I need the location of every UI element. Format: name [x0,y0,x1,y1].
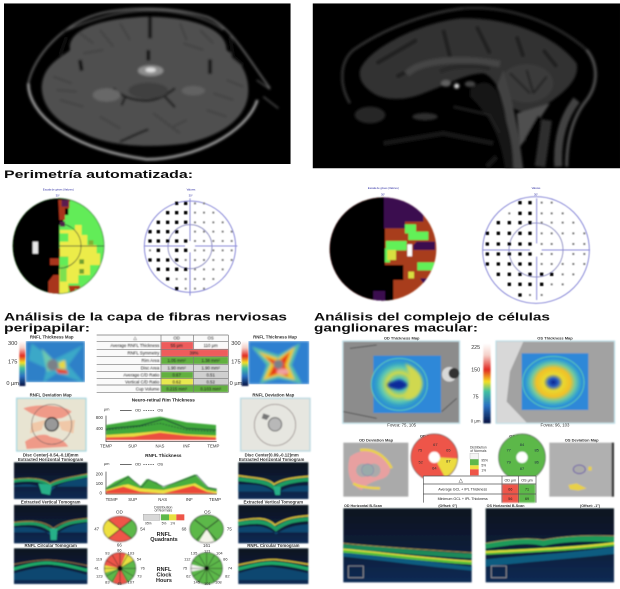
chart: neuro-retinal rim thickness: µm [104,406,110,411]
RNFL data table: RNFL Symmetry [128,350,160,355]
ganglion colour scale: 225 [471,345,480,351]
ganglion legend: 5% [481,464,486,468]
chart: RNFL thickness: TEMP [106,497,118,502]
RNFL clock hours OS: 75 [183,565,188,570]
RNFL clock hours OD: 103 [128,550,135,555]
RNFL clock hours OS: 108 [215,580,222,585]
tick labels and captions under first chart: Extracted Vertical Tomogram [21,499,81,504]
RNFL data table: Average RNFL Thickness [110,343,159,348]
tick labels and captions under first chart: RNFL Circular Tomogram [25,543,77,548]
ganglion sectors: OS: 77 [506,448,512,453]
RNFL clock hours OS: 86 [223,557,228,562]
RNFL data table: Average C/D Ratio [123,372,160,377]
chart: RNFL thickness: TEMP [209,497,221,502]
RNFL thickness map: OD: 175 [8,360,17,366]
chart: RNFL thickness: SUP [128,497,137,502]
ganglion cell table: Average GCL + IPL Thickness [438,488,487,492]
label: RNFL clock hours: Clock [157,572,172,578]
heading: perimetría: Perimetría automatizada: [4,169,193,181]
RNFL data table: 1.38 mm² [202,358,220,363]
RNFL data table: 1.90 mm² [202,365,220,370]
legend: distribution of normals: 95% [145,521,152,525]
RNFL data table: 0.67 [172,372,181,377]
ganglion sectors: OS [499,433,545,481]
RNFL clock hours OS: 101 [204,581,211,586]
RNFL thickness map: OD: 300 [8,341,17,347]
ganglion colour scale: 75 [473,394,479,400]
chart: RNFL thickness: RNFL Thickness [145,453,182,458]
tick labels and captions under first chart: Disc Center(0.09,-0.12)mm [245,452,299,457]
ganglion deviation map: OD [343,437,408,497]
RNFL data table: OD [173,336,180,341]
RNFL deviation map: OD [17,392,86,451]
perimetry deviation grid: right eye [483,186,590,303]
tomograms: left column [14,462,87,584]
ganglion sectors: OS: 79 [506,459,512,464]
ganglion sectors: OD: 65 [446,448,451,453]
RNFL clock hours OS: 135 [191,550,198,555]
tick labels and captions under first chart: SUP [128,444,137,449]
ganglion thickness map: OS [496,335,615,423]
RNFL clock hours OD: 93 [105,550,110,555]
chart: RNFL thickness: µm [104,461,110,466]
ganglion thickness map: OS: OS Thickness Map [537,335,573,340]
legend: distribution of normals [143,505,184,525]
heading: complejo de células: Análisis del complejo de células [314,312,550,324]
RNFL quadrants OS: 75 [227,526,232,531]
chart: neuro-retinal rim thickness: Neuro-retinal Rim Thickness [132,398,195,403]
label: RNFL quadrants: Quadrants [150,537,178,543]
axial brain MRI [4,3,291,164]
RNFL data table [97,335,228,392]
tick labels and captions under first chart: Disc Center(-0.54,-0.18)mm [23,452,79,457]
RNFL clock hours OS: 104 [216,550,223,555]
chart: RNFL thickness: 0 [99,490,102,495]
ganglion cell table: OD µm [505,478,516,482]
RNFL thickness map: OS: RNFL Thickness Map [253,334,297,339]
RNFL clock hours OS: 62 [186,574,191,579]
tick labels and captions under first chart: INF [183,444,191,449]
RNFL clock hours OS: 145 [193,580,201,585]
fovea captions: Fovea: 96, 103 [541,423,570,428]
RNFL clock hours OD: 54 [137,557,142,562]
chart: RNFL thickness: INF [186,497,193,502]
RNFL data table: 0.215 mm³ [166,386,188,391]
ganglion colour scale: 150 [471,368,480,374]
RNFL quadrants OS: OS [204,509,211,514]
RNFL thickness map: OS: 175 [231,360,241,366]
macular tomogram: OD: OD Horizontal B-Scan [344,504,382,508]
fovea captions: Fovea: 75, 105 [387,423,417,428]
RNFL deviation map: OS: RNFL Deviation Map [252,392,295,397]
RNFL data table: Vertical C/D Ratio [125,379,160,384]
tick labels and captions under first chart: TEMP [100,444,112,449]
tick labels and captions under first chart: NAS [156,444,165,449]
RNFL data table: 1.90 mm² [168,365,186,370]
heading: capa de fibras: peripapilar: [4,322,90,334]
RNFL data table: 0.52 [206,379,215,384]
chart: RNFL thickness: OS [157,462,163,467]
RNFL clock hours OD: 123 [96,574,103,579]
RNFL quadrants OD: 54 [140,526,146,531]
tick labels and captions under first chart [18,444,304,548]
RNFL clock hours OD: 45 [117,581,122,586]
RNFL data table: OS [208,336,214,341]
ganglion sectors: OD: 52 [418,459,424,464]
ganglion thickness map: OD [343,335,460,423]
fovea captions [387,423,570,428]
RNFL deviation map: OS [241,392,310,451]
ganglion sectors: OD: OD Sectors [420,433,442,438]
RNFL quadrants OS: 68 [182,526,187,531]
legend: distribution of normals: of Normals [154,509,172,513]
RNFL clock hours OD: 107 [128,580,135,585]
ganglion cell table [423,476,536,503]
RNFL quadrants OD: OD [116,509,123,514]
macular tomogram: OD: (Offset: 0°) [438,504,458,508]
RNFL quadrants OS: 161 [203,543,211,548]
legend: distribution of normals: 1% [170,521,175,525]
RNFL clock hours OD: 41 [94,565,100,570]
ganglion sectors: OD: 67 [433,442,438,447]
RNFL thickness map: OD: RNFL Thickness Map [30,334,74,339]
RNFL quadrants OD: 66 [117,542,122,547]
perimetry map: right eye [327,186,440,305]
ganglion cell table: △ [459,478,463,484]
RNFL clock hours OS: 82 [225,574,230,579]
RNFL data table: 0.103 mm³ [200,386,222,391]
perimetry deviation grid: left eye [144,188,237,296]
ganglion legend: of Normals [470,449,487,453]
ganglion cell table: 71 [525,488,529,492]
RNFL thickness map: OS: 0 µm [230,381,243,387]
RNFL clock hours OS: 74 [228,565,233,570]
RNFL clock hours OD: 73 [137,574,142,579]
heading: capa de fibras: Análisis de la capa de fibras nerviosas [4,312,287,324]
RNFL clock hours OS: 121 [204,548,211,553]
perimetry map: left eye [10,188,110,298]
ganglion cell table: OS µm [521,478,533,482]
RNFL data table: △ [133,336,137,341]
ganglion cell table: 66 [508,488,512,492]
chart: neuro-retinal rim thickness: OS [157,408,163,413]
RNFL data table: Cup Volume [136,386,160,391]
ganglion cell table: Minimum GCL + IPL Thickness [438,497,488,501]
ganglion legend: 1% [481,468,486,472]
heading: complejo de células: ganglionares macular: [314,322,478,334]
perimetry map: right eye: 30° [381,193,385,197]
macular tomogram: OD [343,504,472,582]
RNFL data table: 55 µm [171,343,183,348]
ganglion legend [470,446,488,475]
chart: RNFL thickness: 200 [96,472,104,477]
label: RNFL quadrants: RNFL [157,532,172,538]
RNFL thickness map: OD: 0 µm [6,381,19,387]
tick labels and captions under first chart: Extracted Horizontal Tomogram [239,457,304,462]
chart: neuro-retinal rim thickness: OD [135,408,141,413]
perimetry deviation grid: left eye: Valores [187,188,196,192]
ganglion colour scale: 0 µm [471,418,481,423]
ganglion cell table: 56 [508,497,512,501]
tick labels and captions under first chart: Extracted Vertical Tomogram [244,499,303,504]
tomograms: right column [238,462,308,584]
ganglion colour scale [471,343,491,423]
ganglion sectors: OS: 85 [534,448,540,453]
macular tomogram: OS: (Offset: -1°) [580,504,601,508]
RNFL thickness map: OS [230,334,309,387]
tick labels and captions under first chart: Extracted Horizontal Tomogram [18,457,83,462]
macular tomogram: OS [486,504,614,582]
RNFL quadrants OD: 47 [94,526,100,531]
RNFL deviation map: OD: RNFL Deviation Map [30,392,72,397]
perimetry deviation grid: left eye: 30° [189,194,193,198]
ganglion sectors: OS: 84 [520,442,525,447]
RNFL clock hours OD: 119 [96,557,103,562]
RNFL clock hours OS: 112 [184,557,191,562]
RNFL data table: Rim Area [142,358,160,363]
RNFL quadrants OD [94,509,146,547]
label: RNFL clock hours: RNFL [157,567,172,573]
RNFL data table: 39% [190,350,198,355]
chart: neuro-retinal rim thickness: 800 [96,415,104,420]
label: RNFL clock hours: Hours [156,578,172,584]
ganglion deviation map: OS: OS Deviation Map [565,437,599,442]
RNFL thickness map: OS: 300 [231,341,241,347]
ganglion sectors: OD: 64 [432,465,437,470]
ganglion sectors: OS: OS Sectors [509,433,532,438]
perimetry deviation grid: right eye: Valores [532,186,541,190]
ganglion sectors: OS: 86 [534,459,540,464]
chart: RNFL thickness [96,453,221,502]
chart: neuro-retinal rim thickness [96,398,217,442]
ganglion cell table: 69 [525,497,529,501]
perimetry map: left eye: 30° [56,194,60,198]
tick labels and captions under first chart: RNFL Circular Tomogram [247,543,300,548]
RNFL data table: 0.51 [206,372,215,377]
ganglion sectors: OD: 75 [418,448,423,453]
RNFL quadrants OS [182,509,232,548]
chart: RNFL thickness: 100 [96,481,104,486]
ganglion sectors: OD [411,433,458,481]
perimetry deviation grid: right eye: 30° [534,193,538,197]
sagittal brain MRI [313,3,620,170]
ganglion legend: Distribution [470,446,487,450]
macular tomogram: OS: OS Horizontal B-Scan [487,504,524,508]
legend: distribution of normals: 5% [162,521,166,525]
ganglion thickness map: OD: OD Thickness Map [384,335,420,340]
RNFL clock hours OD [94,548,146,586]
perimetry map: left eye: Escala de grises (Valores) [43,188,74,192]
RNFL clock hours OD: 76 [140,565,146,570]
RNFL clock hours OS [183,548,233,586]
ganglion deviation map: OD: OD Deviation Map [359,437,394,442]
RNFL clock hours OD: 83 [105,580,110,585]
legend: distribution of normals: Distribution [154,505,172,509]
perimetry map: right eye: Escala de grises (Valores) [368,186,399,190]
chart: RNFL thickness: OD [135,462,141,467]
RNFL data table: 1.05 mm² [168,358,186,363]
RNFL data table: 110 µm [204,343,218,348]
RNFL clock hours OD: 86 [117,548,122,553]
tick labels and captions under first chart: TEMP [207,444,219,449]
RNFL data table: Disc Area [141,365,160,370]
ganglion sectors: OS: 87 [520,466,525,471]
chart: RNFL thickness: NAS [158,497,167,502]
RNFL data table: 0.62 [172,379,181,384]
RNFL thickness map: OD [6,334,85,387]
ganglion legend: 95% [481,458,488,462]
chart: neuro-retinal rim thickness: 400 [96,426,104,431]
ganglion deviation map: OS [549,437,614,497]
ganglion sectors: OD: 87 [446,459,451,464]
